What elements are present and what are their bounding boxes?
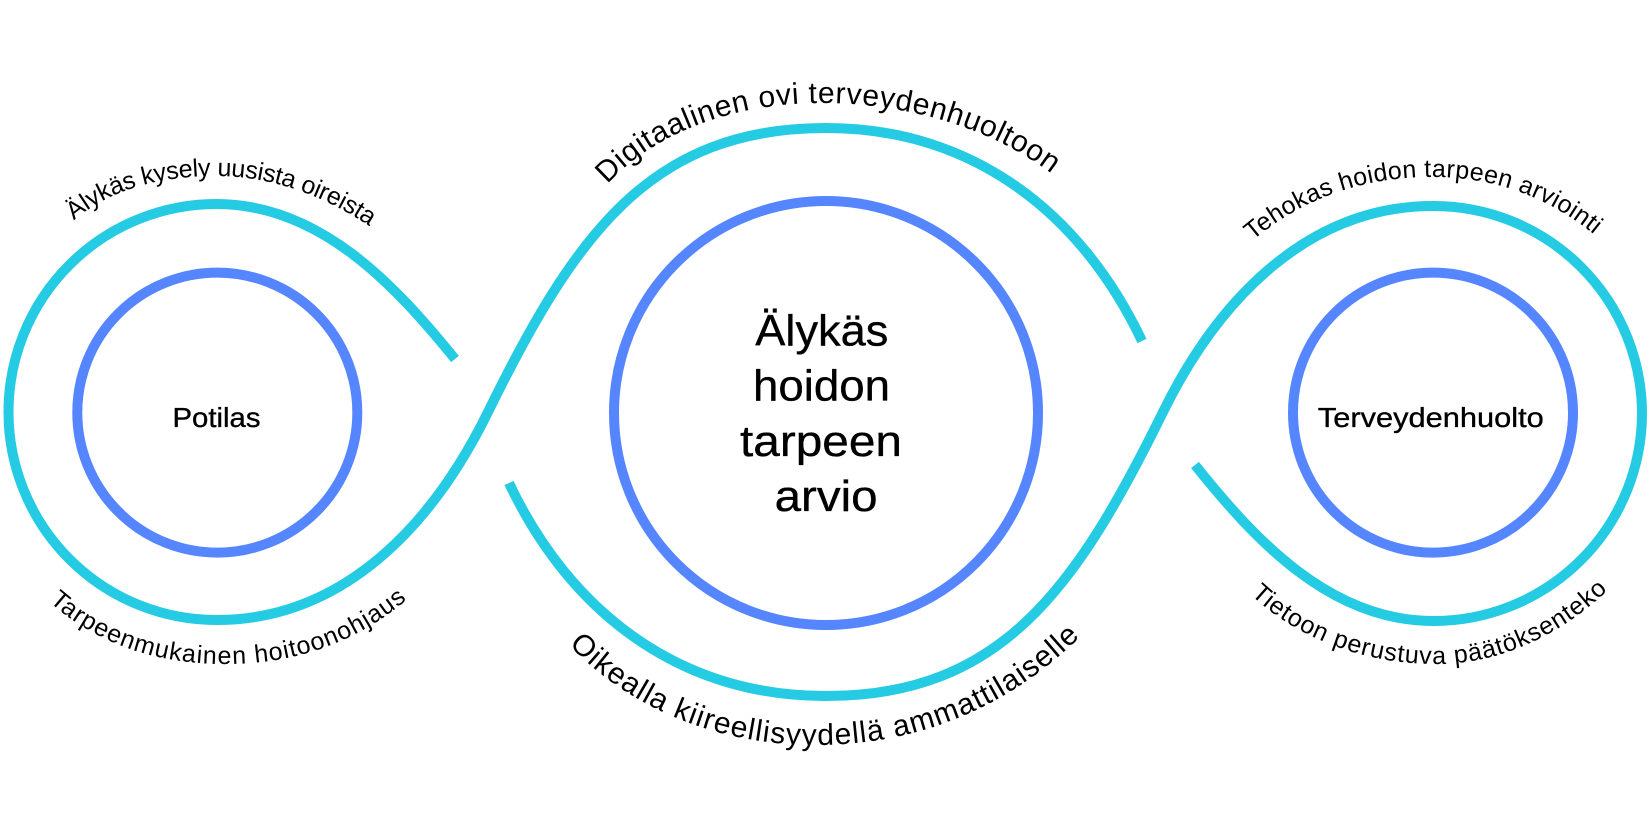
circle: Älykäs hoidon tarpeen arvio: tarpeen [740, 417, 902, 466]
circle: Älykäs hoidon tarpeen arvio [614, 201, 1038, 625]
curved label: Tietoon perustuva päätöksenteko: Tietoon perustuva päätöksenteko [1256, 582, 1605, 668]
circle: Potilas [77, 273, 357, 553]
curved label: Tarpeenmukainen hoitoonohjaus: Tarpeenmukainen hoitoonohjaus [54, 589, 405, 664]
circle: Potilas: Potilas [172, 402, 260, 433]
circle: Terveydenhuolto: Terveydenhuolto [1318, 402, 1544, 433]
curved label: Digitaalinen ovi terveydenhuoltoon: Digitaalinen ovi terveydenhuoltoon [594, 82, 1058, 182]
circle: Terveydenhuolto [1293, 273, 1573, 553]
circle: Älykäs hoidon tarpeen arvio: Älykäs [755, 307, 888, 356]
cyan flow line: bottom of centre to healthcare loop [509, 206, 1642, 696]
circle: Älykäs hoidon tarpeen arvio: arvio [775, 472, 878, 521]
circle: Älykäs hoidon tarpeen arvio: hoidon [753, 362, 890, 411]
curved label: Tehokas hoidon tarpeen arviointi: Tehokas hoidon tarpeen arviointi [1242, 160, 1604, 236]
cyan flow line: patient loop to top of centre [8, 128, 1142, 620]
curved label: Oikealla kiireellisyydellä ammattilaiselle: Oikealla kiireellisyydellä ammattilaiselle [573, 628, 1077, 752]
curved label: Älykäs kysely uusista oireista: Älykäs kysely uusista oireista [64, 158, 374, 226]
